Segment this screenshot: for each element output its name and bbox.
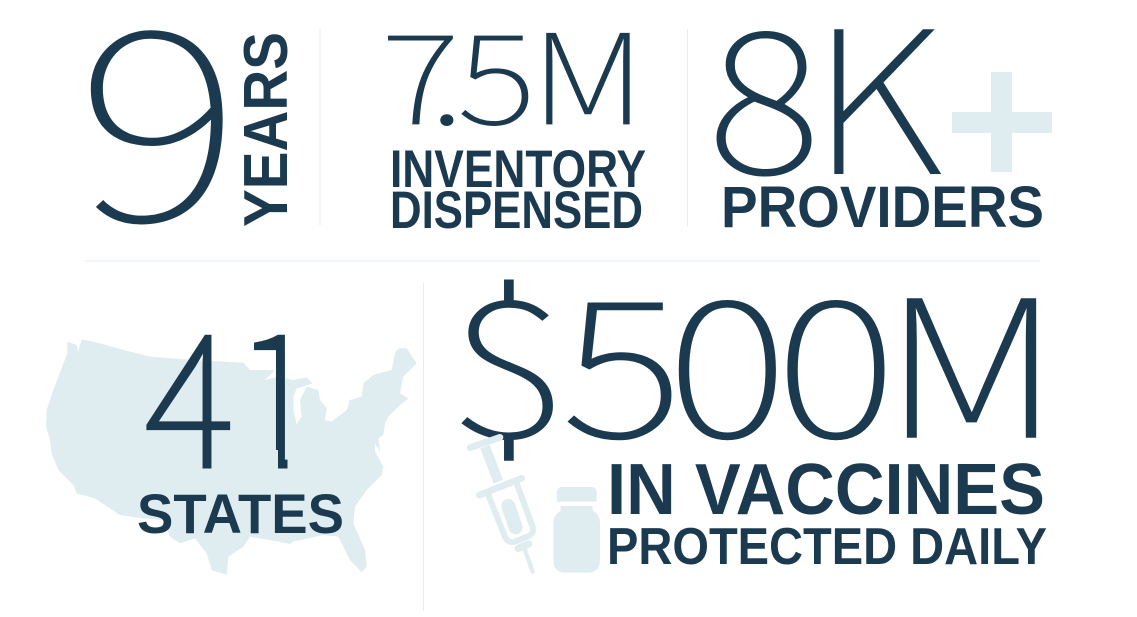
stat: 41 states	[138, 334, 342, 534]
stat: 8K+ providers	[708, 0, 1052, 240]
stat: 7.5M inventory dispensed	[381, 0, 646, 240]
number: 41: 41	[145, 258, 322, 519]
icon: US map	[46, 339, 417, 575]
label: inventory dispensed: DISPENSED	[390, 181, 643, 240]
number: $500M: $500M	[447, 217, 1061, 493]
icon: plus sign	[952, 72, 1052, 172]
icon: vial	[553, 487, 600, 573]
label: in vaccines protected daily: IN VACCINES	[607, 450, 1045, 530]
label: years: YEARS	[232, 32, 301, 227]
label: inventory dispensed	[390, 140, 646, 240]
label: in vaccines protected daily: PROTECTED DAILY	[607, 518, 1047, 576]
icon: syringe	[470, 437, 533, 572]
label: inventory dispensed: INVENTORY	[390, 140, 646, 199]
label: in vaccines protected daily	[607, 450, 1047, 576]
label: states: STATES	[137, 482, 344, 545]
label: providers: PROVIDERS	[721, 175, 1044, 240]
stat: $500M in vaccines	[447, 217, 1061, 576]
stat: 9 years	[76, 0, 301, 298]
